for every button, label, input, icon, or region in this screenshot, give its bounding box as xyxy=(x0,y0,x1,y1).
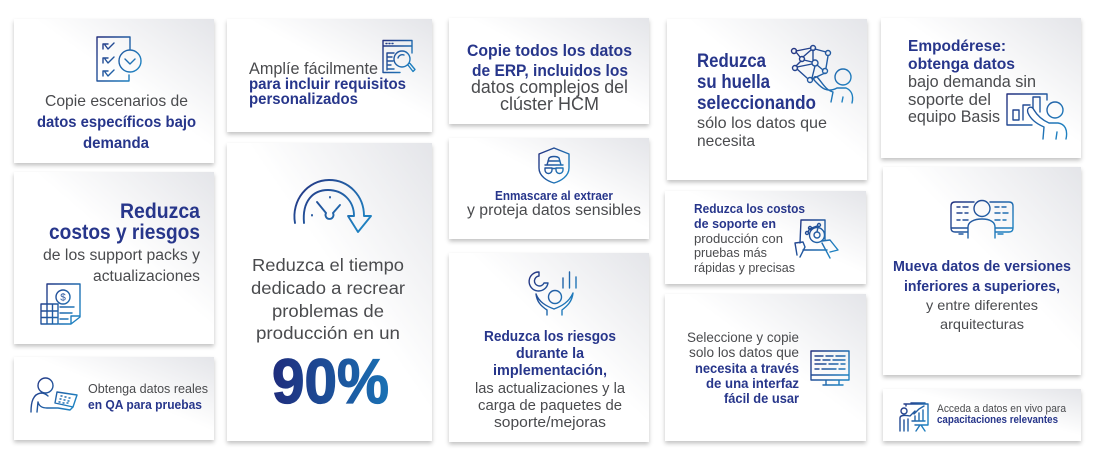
panel: reduzca los riesgos xyxy=(449,253,649,442)
icon: tablet with magnifier and hands xyxy=(795,220,838,258)
panel: reduzca su huella xyxy=(667,19,867,180)
text: copie todos: clúster HCM xyxy=(500,94,599,114)
text: reduzca su huella: seleccionando xyxy=(697,93,816,114)
icon: shield with masked face xyxy=(539,148,569,183)
panel: reduzca el tiempo 90% xyxy=(227,143,432,441)
text: copie escenarios: datos específicos bajo xyxy=(37,114,196,131)
text: amplíe fácilmente: para incluir requisitos xyxy=(249,76,406,93)
text: reduzca costos: de los support packs y xyxy=(43,247,200,264)
text: empodérese: equipo Basis xyxy=(908,108,1000,126)
text: seleccione: solo los datos que xyxy=(689,345,799,360)
text: reduzca los riesgos xyxy=(475,328,626,431)
panel: seleccione y copie xyxy=(665,294,866,441)
text: empodérese: soporte del xyxy=(908,91,991,109)
card background xyxy=(14,172,214,344)
panel: obtenga datos reales xyxy=(14,357,214,440)
stat: 90%: 90% xyxy=(272,347,389,417)
text: reduzca costos xyxy=(43,199,201,285)
text: empodérese: Empodérese: xyxy=(908,38,1006,55)
card background xyxy=(881,18,1081,158)
icon: monitor with data xyxy=(811,351,849,385)
text: obtenga datos: Obtenga datos reales xyxy=(88,381,208,396)
card background xyxy=(665,294,866,441)
text: seleccione xyxy=(687,330,800,406)
text: amplíe fácilmente xyxy=(249,60,406,108)
text: mueva datos: inferiores a superiores, xyxy=(904,278,1060,295)
text: copie escenarios: Copie escenarios de xyxy=(45,93,188,110)
icon: network and person xyxy=(792,46,853,103)
text: reduzca el tiempo xyxy=(251,255,405,343)
icon: invoice and table: $ xyxy=(60,292,66,304)
panel: copie todos los datos xyxy=(449,18,649,124)
card background xyxy=(449,138,649,239)
text: acceda: capacitaciones relevantes xyxy=(937,414,1058,426)
text: reduzca su huella: Reduzca xyxy=(697,51,766,72)
icon: presenter with board xyxy=(900,403,928,431)
text: reduzca los riesgos: Reduzca los riesgos xyxy=(484,328,616,345)
card background xyxy=(14,357,214,440)
text: reduzca costos: Reduzca xyxy=(120,199,201,223)
panel: mueva datos xyxy=(883,167,1081,375)
text: obtenga datos xyxy=(88,381,208,412)
icon: person at chart board xyxy=(1007,94,1067,139)
text: seleccione: fácil de usar xyxy=(724,391,800,406)
text: reduzca su huella xyxy=(697,51,827,150)
text: amplíe fácilmente: personalizados xyxy=(249,91,358,108)
text: costos de soporte: producción con xyxy=(694,232,783,246)
icon: clock with arrow xyxy=(294,180,371,232)
card background xyxy=(665,191,866,284)
text: mueva datos: arquitecturas xyxy=(940,316,1024,332)
card background xyxy=(227,143,432,441)
text: empodérese: bajo demanda sin xyxy=(908,73,1036,91)
text: seleccione: necesita a través xyxy=(695,361,799,376)
panel: acceda a datos xyxy=(883,389,1081,441)
panel: reduzca costos de soporte xyxy=(665,191,866,284)
panel: enmascare al extraer xyxy=(449,138,649,239)
text: reduzca su huella: su huella xyxy=(697,72,770,93)
text: enmascare: Enmascare al extraer xyxy=(495,189,613,203)
text: reduzca los riesgos: las actualizaciones y la xyxy=(475,381,626,397)
text: reduzca los riesgos: soporte/mejoras xyxy=(494,415,606,431)
card background xyxy=(227,19,432,132)
card background xyxy=(883,389,1081,441)
text: costos de soporte: de soporte en xyxy=(694,217,776,231)
text: costos de soporte: Reduzca los costos xyxy=(694,202,805,216)
text: acceda xyxy=(937,403,1067,426)
panel: reduzca costos y riesgos xyxy=(14,172,214,344)
panel: amplíe fácilmente xyxy=(227,19,432,132)
text: obtenga datos: en QA para pruebas xyxy=(88,397,202,412)
icon: person at screen xyxy=(951,200,1013,238)
text: copie todos: datos complejos del xyxy=(471,77,628,97)
panel: copie escenarios xyxy=(14,19,214,163)
text: reduzca los riesgos: carga de paquetes de xyxy=(478,398,622,414)
text: costos de soporte: rápidas y precisas xyxy=(694,261,795,275)
text: mueva datos: y entre diferentes xyxy=(926,297,1038,313)
text: reduzca el tiempo: problemas de xyxy=(272,301,384,321)
text: mueva datos: Mueva datos de versiones xyxy=(893,258,1071,275)
text: amplíe fácilmente: Amplíe fácilmente xyxy=(249,60,378,78)
text: copie escenarios: demanda xyxy=(83,135,149,152)
text: seleccione: de una interfaz xyxy=(706,376,799,391)
text: empodérese: obtenga datos xyxy=(908,56,1015,73)
text: seleccione: Seleccione y copie xyxy=(687,330,799,345)
text: reduzca los riesgos: implementación, xyxy=(493,362,607,379)
text: copie escenarios xyxy=(37,93,196,152)
text: acceda: Acceda a datos en vivo para xyxy=(937,403,1067,415)
card background xyxy=(14,19,214,163)
text: reduzca los riesgos: durante la xyxy=(516,345,585,362)
text: enmascare xyxy=(467,189,641,219)
icon: window with magnifier xyxy=(383,40,415,72)
text: reduzca el tiempo: producción en un xyxy=(256,323,400,343)
text: copie todos: Copie todos los datos xyxy=(467,42,632,60)
text: reduzca costos: actualizaciones xyxy=(93,268,200,285)
icon: invoice and table xyxy=(41,284,80,324)
text: costos de soporte: pruebas más xyxy=(694,246,767,260)
card background xyxy=(449,18,649,124)
text: empodérese xyxy=(908,38,1036,126)
text: copie todos: de ERP, incluidos los xyxy=(472,62,628,80)
text: reduzca el tiempo: dedicado a recrear xyxy=(251,278,405,298)
panel: empodérese xyxy=(881,18,1081,158)
text: enmascare: y proteja datos sensibles xyxy=(467,202,641,219)
icon: person with raised arms xyxy=(529,272,576,315)
text: costos de soporte xyxy=(694,202,805,275)
text: reduzca el tiempo: Reduzca el tiempo xyxy=(252,255,404,275)
text: reduzca su huella: necesita xyxy=(697,133,755,150)
card background xyxy=(667,19,867,180)
text: copie todos xyxy=(467,42,632,114)
icon: checklist and clock xyxy=(97,37,141,81)
text: reduzca costos: costos y riesgos xyxy=(49,220,200,244)
card background xyxy=(449,253,649,442)
text: reduzca su huella: sólo los datos que xyxy=(697,115,827,132)
text: mueva datos xyxy=(893,258,1071,332)
icon: person with tablet xyxy=(31,378,77,412)
card background xyxy=(883,167,1081,375)
